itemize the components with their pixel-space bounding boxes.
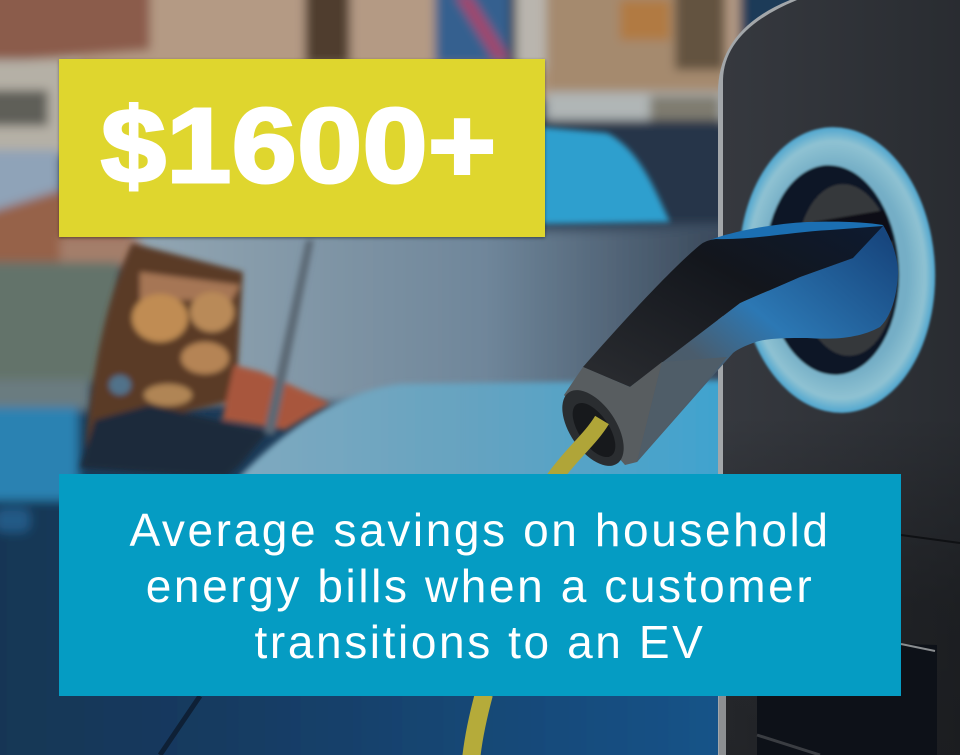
plug collar <box>564 362 662 465</box>
description box: Average savings on household <box>129 504 831 556</box>
thin bottom crease of the car door <box>160 696 200 755</box>
plug top blue edge <box>710 222 883 262</box>
stat box: $1600+: $1600+ <box>101 87 497 205</box>
charging plug <box>550 222 898 477</box>
charging post <box>718 0 960 755</box>
stat box: $1600+ <box>59 59 545 237</box>
plug nose <box>550 379 636 477</box>
description box: energy bills when a customer <box>146 560 814 612</box>
plug body <box>583 225 898 462</box>
plug grip <box>583 226 883 387</box>
charging cable <box>471 420 602 755</box>
window reflection <box>80 240 330 478</box>
charging socket ring <box>732 122 942 418</box>
description box: transitions to an EV <box>255 616 705 668</box>
hood of car <box>240 127 725 505</box>
description box <box>59 474 901 696</box>
